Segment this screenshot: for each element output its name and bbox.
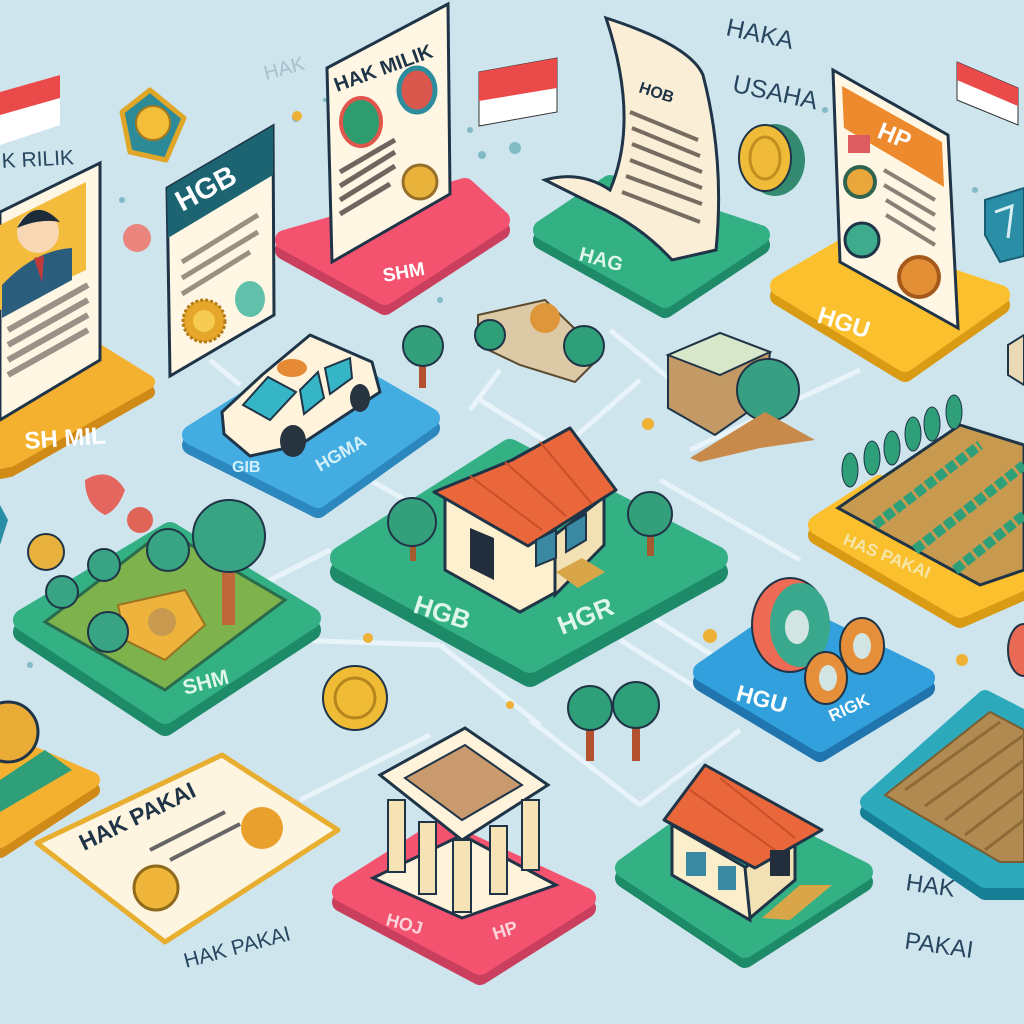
text: K RILIK: K RILIK bbox=[1, 146, 75, 173]
icon: small tool cluster bbox=[475, 300, 604, 382]
platform: yellow right bbox=[818, 485, 1024, 618]
icon: ring at right edge bbox=[1008, 624, 1024, 676]
icon: car bbox=[222, 335, 380, 457]
icon: park trees bbox=[46, 500, 265, 660]
icon: rings bbox=[752, 578, 884, 704]
platform: left green park: SHM bbox=[180, 666, 231, 700]
icon: flag right red band bbox=[957, 62, 1018, 106]
document: HAK MILIK: HAK MILIK bbox=[331, 40, 436, 97]
icon: flag left bbox=[0, 75, 60, 145]
certificate: HAK PAKAI: HAK PAKAI bbox=[75, 777, 200, 855]
platform: blue car bbox=[192, 355, 430, 508]
document: HGB: HGB bbox=[170, 160, 242, 218]
platform: blue lower right: RIGK bbox=[826, 690, 873, 726]
icon: coin and field bottom left bbox=[0, 702, 72, 812]
icon: gold coin top bbox=[739, 124, 805, 196]
icon: box and gavel bbox=[668, 333, 815, 462]
platform: blue lower right bbox=[703, 612, 925, 752]
document: HP: HP bbox=[874, 118, 915, 155]
text: HAKA USAHA: HAKA bbox=[724, 13, 796, 55]
document: HGB bbox=[167, 126, 274, 376]
icon: faded HAK label: HAK bbox=[262, 53, 308, 85]
platform: orange left bbox=[0, 352, 148, 472]
platform: blue lower right: HGU bbox=[734, 680, 790, 718]
platform: red bottom bbox=[342, 830, 586, 975]
platform: left green park bbox=[24, 530, 310, 725]
platform: centre green bbox=[342, 451, 716, 675]
icon: shield bbox=[985, 188, 1024, 262]
platform: green bottom bbox=[625, 800, 863, 958]
text: HAKA USAHA: USAHA bbox=[730, 70, 821, 115]
icon: gold seal bbox=[122, 90, 184, 160]
platform: yellow right: HAS PAKAI bbox=[841, 530, 933, 582]
icon: farm rows bbox=[838, 395, 1024, 585]
certificate: HAK PAKAI bbox=[37, 755, 338, 942]
document: HAK MILIK bbox=[327, 4, 450, 262]
platform: yellow top right: HGU bbox=[814, 302, 873, 344]
text: HAK PAKAI right: PAKAI bbox=[903, 928, 975, 964]
text: HAK PAKAI right: HAK bbox=[904, 869, 957, 903]
icon: flag centre bbox=[479, 58, 557, 126]
document: curled HOB scroll: HOB bbox=[637, 80, 676, 107]
document: portrait card bbox=[0, 163, 100, 420]
icon: lower house bbox=[664, 765, 832, 920]
icon: flag right bbox=[957, 62, 1018, 125]
icon: temple bbox=[373, 728, 556, 918]
platform: teal farm field bbox=[868, 698, 1024, 892]
platform: orange bottom left bbox=[0, 740, 92, 850]
platform: blue car: HGMA bbox=[312, 431, 370, 475]
platform: red top: SHM bbox=[381, 259, 426, 287]
icon: gold coin middle bbox=[323, 666, 387, 730]
platform: red bottom: HOJ bbox=[384, 910, 425, 938]
icon: centre house bbox=[388, 428, 672, 612]
document: curled HOB scroll bbox=[545, 18, 719, 260]
platform: yellow top right bbox=[780, 245, 1000, 372]
icon: tree top bbox=[403, 326, 443, 388]
platform: blue car: GIB bbox=[232, 459, 260, 476]
platform: green top bbox=[543, 185, 760, 308]
text: HAK PAKAI caption: HAK PAKAI bbox=[181, 922, 293, 973]
platform: red top bbox=[285, 188, 500, 305]
platform: green top: HAG bbox=[577, 244, 625, 276]
document: HP bbox=[833, 70, 958, 328]
icon: small markers bbox=[0, 224, 153, 570]
platform: centre green: HGB bbox=[410, 589, 474, 636]
icon: beige box at right edge bbox=[1008, 335, 1024, 385]
platform: orange left: SH MIL bbox=[24, 422, 107, 455]
platform: red bottom: HP bbox=[490, 917, 520, 944]
icon: two trees bbox=[568, 682, 659, 761]
platform: centre green: HGR bbox=[553, 591, 618, 641]
